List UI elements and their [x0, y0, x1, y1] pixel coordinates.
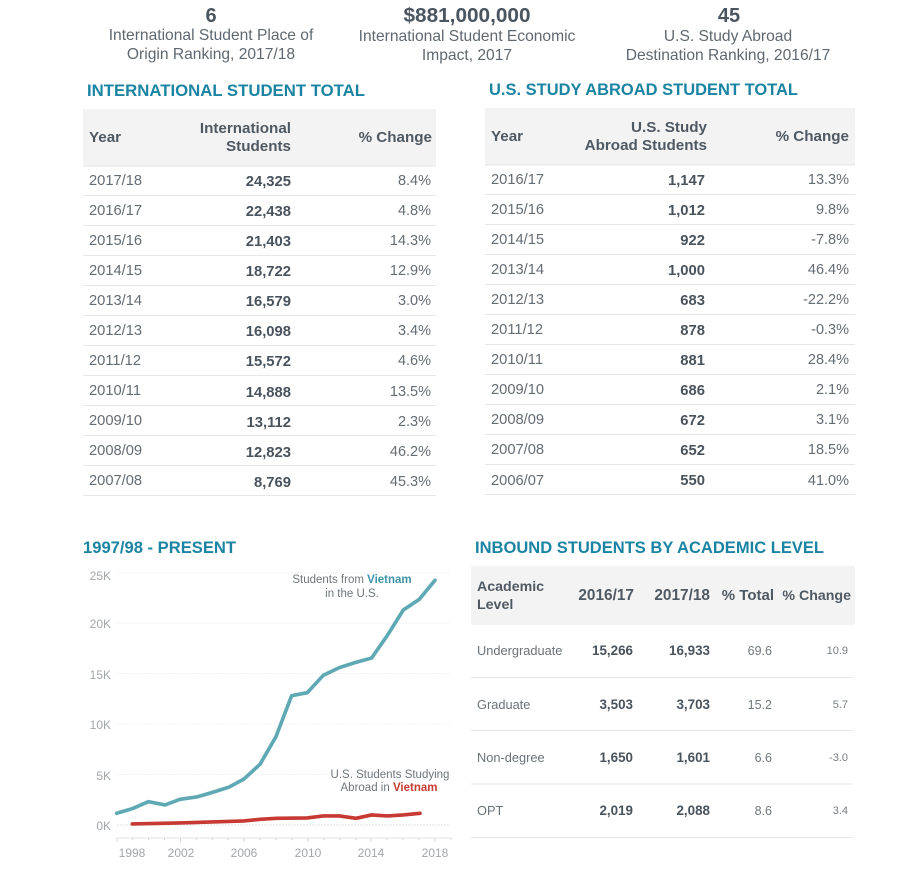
- table: international students: 2.3%: [398, 414, 431, 430]
- annotation: U.S. students abroad: [331, 769, 449, 794]
- x axis: 1998: [119, 846, 146, 860]
- table: U.S. study abroad students: 46.4%: [808, 262, 849, 278]
- table: inbound students by academic level: 6.6: [755, 751, 772, 765]
- table: inbound students by academic level: 69.6: [748, 644, 772, 658]
- table: U.S. study abroad students: 13.3%: [808, 172, 849, 188]
- stat: place of origin ranking: International Student Place of: [109, 27, 314, 44]
- annotation: students from Vietnam: [292, 574, 412, 600]
- table: U.S. study abroad students: 28.4%: [808, 352, 849, 368]
- table: inbound students by academic level: 16,933: [669, 643, 710, 658]
- table: international students: 8,769: [254, 475, 291, 491]
- x axis: [117, 838, 451, 860]
- table: international students: 12.9%: [390, 263, 431, 279]
- table: inbound students by academic level: [471, 566, 855, 838]
- table: inbound students by academic level: 3.4: [833, 805, 848, 817]
- y axis labels: 0K: [96, 819, 111, 833]
- table: U.S. study abroad students: 2015/16: [491, 202, 544, 218]
- stat: economic impact: $881,000,000: [404, 5, 530, 27]
- table: international students: 22,438: [246, 204, 291, 220]
- table: U.S. study abroad students: 878: [680, 323, 705, 339]
- table: U.S. study abroad students: [485, 108, 855, 494]
- series: U.S. students studying abroad in Vietnam: [132, 813, 420, 824]
- table: international students: 2011/12: [89, 353, 141, 369]
- table: inbound students by academic level: Non-degree: [477, 750, 545, 765]
- stat: study abroad destination ranking: U.S. Study Abroad: [664, 28, 792, 45]
- table: international students: Students: [226, 138, 291, 155]
- table: U.S. study abroad students: 2011/12: [491, 322, 543, 338]
- table: international students: 16,098: [246, 324, 291, 340]
- table: inbound students by academic level: 15.2: [748, 698, 772, 712]
- heading: inbound students by academic level: INBOUND STUDENTS BY ACADEMIC LEVEL: [475, 539, 824, 557]
- table: U.S. study abroad students: 2010/11: [491, 352, 543, 368]
- table: international students: 3.0%: [398, 293, 431, 309]
- table: inbound students by academic level: 3,703: [676, 697, 710, 712]
- table: inbound students by academic level: 3,503: [599, 697, 633, 712]
- annotation: U.S. students abroad: U.S. Students Studying: [331, 769, 449, 781]
- y axis labels: [90, 569, 111, 833]
- table: international students: 24,325: [246, 174, 291, 190]
- table: U.S. study abroad students: U.S. Study: [631, 119, 708, 136]
- table: U.S. study abroad students: 922: [680, 233, 705, 249]
- table: U.S. study abroad students: -7.8%: [811, 232, 849, 248]
- x axis: 2014: [358, 846, 385, 860]
- table: U.S. study abroad students: Abroad Students: [585, 137, 707, 154]
- stat: study abroad destination ranking: 45: [718, 5, 740, 27]
- table: inbound students by academic level: 5.7: [833, 699, 848, 711]
- stat: economic impact: Impact, 2017: [422, 47, 512, 64]
- table: U.S. study abroad students: 2.1%: [816, 382, 849, 398]
- table: international students: Year: [89, 129, 121, 146]
- heading: 1997/98 to present: 1997/98 - PRESENT: [83, 539, 236, 557]
- stat: place of origin ranking: 6: [205, 5, 217, 27]
- table: international students: 16,579: [246, 294, 291, 310]
- table: U.S. study abroad students: 686: [680, 383, 705, 399]
- annotation: students from Vietnam: Students from Vietnam: [292, 574, 412, 586]
- table: international students: [83, 109, 436, 496]
- table: inbound students by academic level: % Total: [722, 587, 774, 604]
- table: inbound students by academic level: 2016/17: [578, 587, 634, 604]
- table: U.S. study abroad students: 652: [680, 443, 705, 459]
- table: international students: 2015/16: [89, 233, 142, 249]
- table: U.S. study abroad students: 41.0%: [808, 473, 849, 489]
- annotation: U.S. students abroad: Abroad in Vietnam: [341, 782, 437, 794]
- stat: study abroad destination ranking: [626, 5, 830, 64]
- table: international students: 2014/15: [89, 263, 142, 279]
- table: international students: 2009/10: [89, 413, 142, 429]
- table: international students: 4.6%: [398, 353, 431, 369]
- table: international students: 13,112: [247, 415, 291, 431]
- table: international students: 45.3%: [390, 474, 431, 490]
- table: U.S. study abroad students: 2016/17: [491, 172, 544, 188]
- table: international students: % Change: [359, 129, 432, 146]
- table: international students: 15,572: [246, 354, 291, 370]
- table: international students: 2007/08: [89, 473, 142, 489]
- table: inbound students by academic level: 15,266: [592, 643, 633, 658]
- table: U.S. study abroad students: 2008/09: [491, 412, 544, 428]
- table: U.S. study abroad students: 9.8%: [816, 202, 849, 218]
- stat: study abroad destination ranking: Destination Ranking, 2016/17: [626, 47, 830, 64]
- series: students from Vietnam in the U.S.: [117, 580, 435, 813]
- table: inbound students by academic level: OPT: [477, 803, 503, 818]
- table: U.S. study abroad students: 1,147: [668, 173, 705, 189]
- table: international students: 2013/14: [89, 293, 142, 309]
- table: U.S. study abroad students: 2012/13: [491, 292, 544, 308]
- table: international students: International: [200, 120, 291, 137]
- table: U.S. study abroad students: 672: [680, 413, 705, 429]
- heading: U.S. study abroad student total: U.S. STUDY ABROAD STUDENT TOTAL: [489, 81, 798, 99]
- x axis: 2002: [168, 846, 195, 860]
- table: international students: 12,823: [246, 445, 291, 461]
- table: inbound students by academic level: % Change: [782, 588, 851, 604]
- table: U.S. study abroad students: 1,012: [668, 203, 705, 219]
- x axis: 2010: [295, 846, 322, 860]
- annotation: students from Vietnam: in the U.S.: [325, 588, 379, 600]
- table: U.S. study abroad students: 2009/10: [491, 382, 544, 398]
- table: U.S. study abroad students: Year: [491, 128, 523, 145]
- table: inbound students by academic level: 2,088: [676, 803, 711, 818]
- table: inbound students by academic level: 8.6: [755, 804, 772, 818]
- stat: economic impact: International Student Economic: [359, 28, 576, 45]
- stat: place of origin ranking: Origin Ranking, 2017/18: [127, 46, 295, 63]
- y axis labels: 10K: [90, 718, 111, 732]
- table: U.S. study abroad students: 2013/14: [491, 262, 544, 278]
- table: U.S. study abroad students: 18.5%: [808, 442, 849, 458]
- table: inbound students by academic level: Academic: [477, 579, 544, 595]
- stat: place of origin ranking: [109, 5, 314, 63]
- table: international students: 8.4%: [398, 173, 431, 189]
- table: international students: 13.5%: [390, 384, 431, 400]
- line chart: students 1997/98 to present: [90, 569, 451, 860]
- table: U.S. study abroad students: 881: [680, 353, 705, 369]
- table: international students: 18,722: [246, 264, 291, 280]
- table: inbound students by academic level: 2,019: [599, 803, 633, 818]
- y axis labels: 15K: [90, 668, 111, 682]
- y axis labels: 25K: [90, 569, 111, 583]
- table: U.S. study abroad students: % Change: [776, 128, 849, 145]
- table: inbound students by academic level: -3.0: [829, 752, 848, 764]
- table: U.S. study abroad students: -22.2%: [803, 292, 849, 308]
- table: U.S. study abroad students: 683: [680, 293, 705, 309]
- table: U.S. study abroad students: 3.1%: [816, 412, 849, 428]
- table: U.S. study abroad students: 2006/07: [491, 473, 544, 489]
- table: international students: 46.2%: [390, 444, 431, 460]
- x axis: 2006: [231, 846, 258, 860]
- table: inbound students by academic level: Level: [477, 597, 513, 613]
- table: U.S. study abroad students: -0.3%: [811, 322, 849, 338]
- stat: economic impact: [359, 5, 576, 64]
- table: U.S. study abroad students: 2007/08: [491, 442, 544, 458]
- y axis labels: 5K: [96, 769, 111, 783]
- y axis labels: 20K: [90, 617, 111, 631]
- table: inbound students by academic level: Graduate: [477, 697, 530, 712]
- table: international students: 2010/11: [89, 383, 141, 399]
- table: U.S. study abroad students: 2014/15: [491, 232, 544, 248]
- table: U.S. study abroad students: 1,000: [668, 263, 705, 279]
- table: inbound students by academic level: 1,650: [599, 750, 633, 765]
- heading: international student total: INTERNATIONAL STUDENT TOTAL: [87, 82, 365, 100]
- table: international students: 2012/13: [89, 323, 142, 339]
- x axis: 2018: [422, 846, 449, 860]
- table: inbound students by academic level: Undergraduate: [477, 643, 562, 658]
- table: inbound students by academic level: 10.9: [827, 645, 848, 657]
- table: international students: 14.3%: [390, 233, 431, 249]
- table: inbound students by academic level: 1,601: [676, 750, 711, 765]
- table: inbound students by academic level: 2017/18: [654, 587, 710, 604]
- table: international students: 21,403: [246, 234, 291, 250]
- table: international students: 2008/09: [89, 443, 142, 459]
- table: international students: 4.8%: [398, 203, 431, 219]
- table: international students: 14,888: [246, 385, 291, 401]
- table: international students: 3.4%: [398, 323, 431, 339]
- table: international students: 2016/17: [89, 203, 142, 219]
- table: international students: 2017/18: [89, 173, 142, 189]
- table: U.S. study abroad students: 550: [680, 473, 705, 489]
